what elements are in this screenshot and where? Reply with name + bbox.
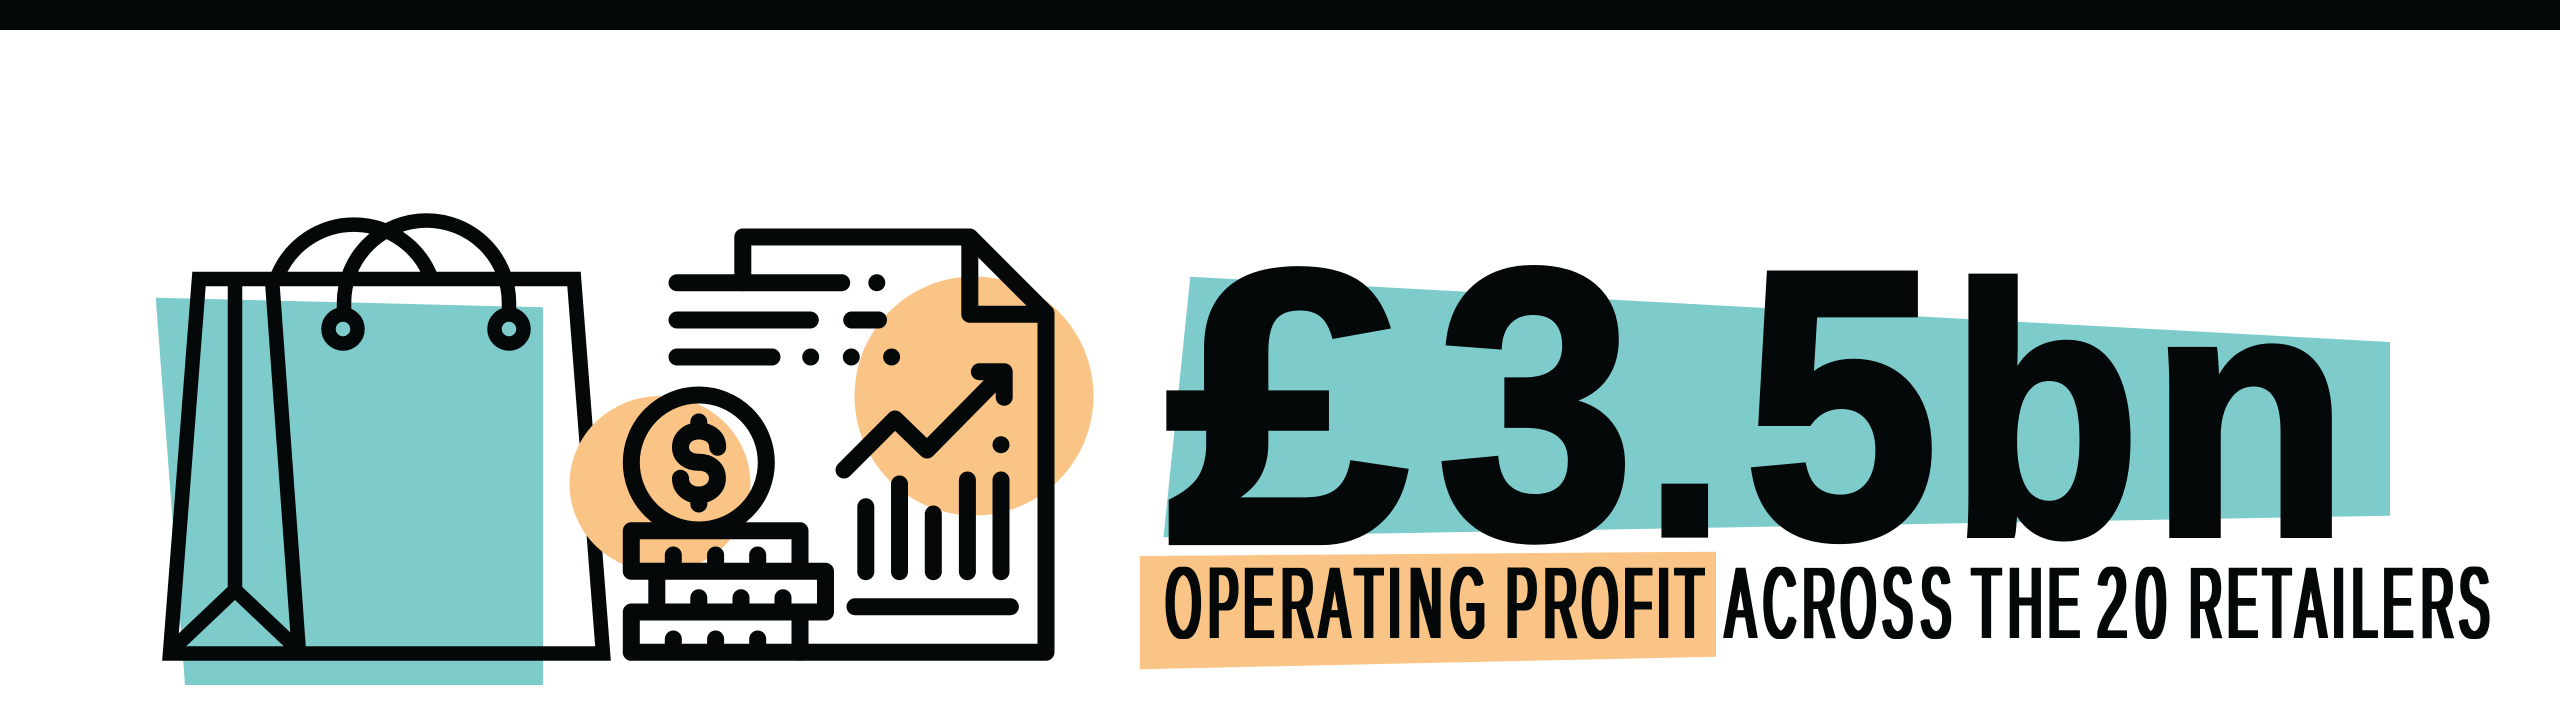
document dots bbox=[802, 274, 1010, 453]
teal banner behind headline bbox=[1164, 277, 2390, 537]
icon: financial report with coins bbox=[570, 237, 1094, 652]
subtitle: operating profit across the 20 retailers: OPERATING bbox=[1166, 546, 1485, 660]
bag handles bbox=[278, 220, 509, 315]
headline: £3.5bn: . bbox=[1645, 248, 1725, 602]
subtitle: operating profit across the 20 retailers: 20 bbox=[2097, 547, 2166, 660]
bag body outline bbox=[170, 279, 603, 654]
teal backdrop behind bag bbox=[156, 298, 543, 685]
orange circle behind chart bbox=[854, 276, 1094, 516]
document outline bbox=[631, 237, 1046, 652]
subtitle: operating profit across the 20 retailers: THE bbox=[1972, 545, 2079, 660]
headline: £3.5bn bbox=[1166, 190, 2349, 624]
orange highlight behind subtitle bbox=[1140, 552, 1716, 669]
headline: £3.5bn: £ bbox=[1166, 190, 1408, 624]
subtitle: operating profit across the 20 retailers: ACROSS bbox=[1726, 546, 1951, 660]
headline: £3.5bn: 5 bbox=[1744, 193, 1938, 618]
coin with dollar sign bbox=[631, 395, 766, 530]
orange circle behind coins bbox=[570, 396, 750, 572]
stack of coins bbox=[631, 531, 826, 652]
subtitle: operating profit across the 20 retailers bbox=[1166, 545, 2489, 660]
bar chart bbox=[855, 480, 1010, 607]
subtitle: operating profit across the 20 retailers: RETAILERS bbox=[2190, 546, 2489, 660]
headline: £3.5bn: 3 bbox=[1438, 190, 1634, 618]
rising arrow bbox=[844, 372, 1004, 470]
handle eyelets bbox=[328, 314, 524, 344]
bag gusset folds bbox=[177, 279, 299, 653]
headline: £3.5bn: n bbox=[2150, 220, 2349, 609]
top black bar bbox=[0, 0, 2560, 30]
document text lines bbox=[677, 283, 878, 357]
headline: £3.5bn: b bbox=[1950, 213, 2140, 610]
subtitle: operating profit across the 20 retailers: PROFIT bbox=[1506, 545, 1704, 660]
icon: shopping bag bbox=[156, 220, 603, 685]
